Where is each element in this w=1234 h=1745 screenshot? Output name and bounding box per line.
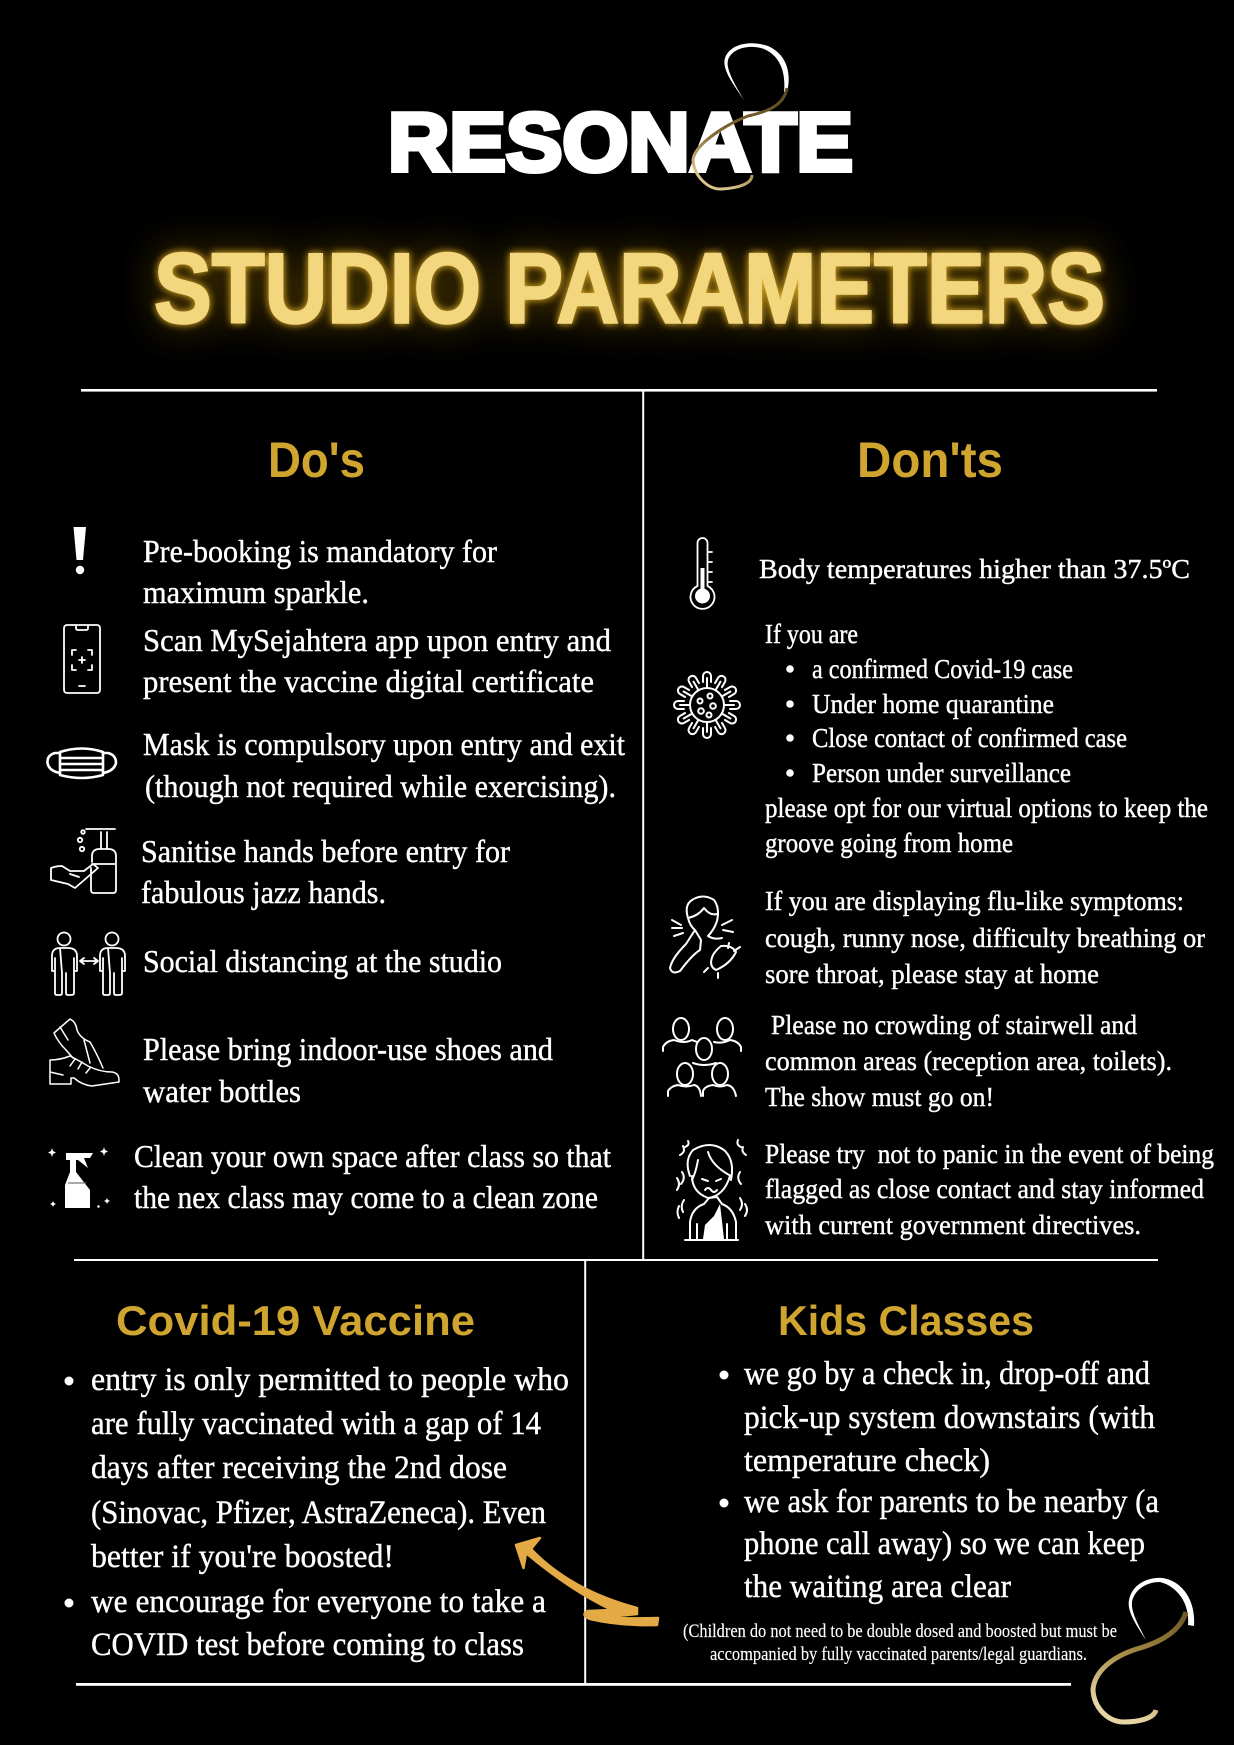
- icon: phone scan: [64, 625, 100, 693]
- logo: Resonate wordmark with swirl: [388, 43, 853, 189]
- bullet list: vaccination: are fully vaccinated with a gap of 14: [91, 1406, 541, 1442]
- bullet list: vaccination: better if you're boosted!: [91, 1539, 394, 1575]
- bullet list: vaccination: we encourage for everyone to take a: [91, 1584, 546, 1620]
- heading: Do's: Do's: [268, 432, 365, 488]
- text: mask: Mask is compulsory upon entry and exit: [143, 726, 625, 762]
- heading: Covid-19 Vaccine: Covid-19 Vaccine: [116, 1297, 475, 1344]
- bullet list: kids: pick-up system downstairs (with: [744, 1400, 1155, 1436]
- text: sanitise: [141, 833, 510, 910]
- bullet list: kids: temperature check): [744, 1443, 990, 1479]
- text: do not panic: [765, 1139, 1214, 1240]
- bullet list: vaccination: (Sinovac, Pfizer, AstraZeneca). Even: [91, 1495, 546, 1531]
- text: confirmed case list: Under home quarantine: [812, 689, 1054, 719]
- bullet list: vaccination: entry is only permitted to people who: [91, 1362, 569, 1398]
- bullet list: kids: [720, 1356, 1159, 1605]
- note: children: (Children do not need to be double dosed and boosted but must be: [683, 1622, 1117, 1642]
- icon: crowd of people: [663, 1018, 741, 1096]
- panel: Don'ts: [663, 432, 1214, 1240]
- note: children: accompanied by fully vaccinated parents/legal guardians.: [710, 1645, 1087, 1665]
- text: flu-like symptoms: [765, 886, 1205, 989]
- icon: virus: [674, 672, 740, 738]
- icon: hand sanitiser: [51, 829, 116, 893]
- text: pre-booking: Pre-booking is mandatory for: [143, 533, 497, 569]
- text: no crowding: common areas (reception area, toilets).: [765, 1046, 1172, 1076]
- icon: spray bottle: [48, 1147, 110, 1208]
- text: no crowding: [765, 1010, 1172, 1112]
- bullet list: vaccination: [64, 1362, 569, 1663]
- text: social distancing: Social distancing at the studio: [143, 943, 502, 979]
- icon: social distancing: [52, 932, 125, 995]
- panel: Covid-19 Vaccine: [64, 1297, 569, 1663]
- bullet list: kids: we ask for parents to be nearby (a: [744, 1484, 1159, 1520]
- text: do not panic: flagged as close contact and stay informed: [765, 1174, 1204, 1204]
- bullet list: vaccination: COVID test before coming to class: [91, 1627, 524, 1663]
- text: confirmed case list: Person under surveillance: [812, 758, 1071, 788]
- bullet list: kids: we go by a check in, drop-off and: [744, 1356, 1150, 1392]
- text: flu-like symptoms: sore throat, please stay at home: [765, 959, 1099, 989]
- panel: Kids Classes: [683, 1297, 1159, 1665]
- text: no crowding: Please no crowding of stairwell and: [771, 1010, 1137, 1040]
- icon: face mask: [47, 748, 116, 778]
- text: shoes: [143, 1031, 553, 1109]
- text: body temperature: Body temperatures higher than 37.5ºC: [759, 554, 1190, 584]
- text: flu-like symptoms: If you are displaying flu-like symptoms:: [765, 886, 1184, 916]
- text: MySejahtera: Scan MySejahtera app upon entry and: [143, 622, 611, 658]
- text: do not panic: with current government directives.: [765, 1210, 1141, 1240]
- text: clean space: the nex class may come to a clean zone: [134, 1179, 598, 1215]
- text: clean space: Clean your own space after class so that: [134, 1138, 611, 1174]
- icon: exclamation mark: [74, 527, 86, 574]
- icon: corner swirl: [1093, 1578, 1194, 1722]
- note: children: [683, 1622, 1117, 1665]
- icon: sick person: [670, 896, 740, 978]
- text: do not panic: Please try not to panic in the event of being: [765, 1139, 1214, 1169]
- text: sanitise: fabulous jazz hands.: [141, 874, 386, 910]
- text: MySejahtera: present the vaccine digital certificate: [143, 663, 594, 699]
- text: clean space: [134, 1138, 611, 1215]
- text: confirmed case list: Close contact of confirmed case: [812, 723, 1127, 753]
- text: confirmed case list: If you are: [765, 619, 858, 649]
- bullet list: kids: phone call away) so we can keep: [744, 1526, 1145, 1562]
- icon: shoes: [50, 1019, 119, 1086]
- title: Studio Parameters: STUDIO PARAMETERS: [154, 232, 1105, 344]
- heading: Don'ts: Don'ts: [857, 432, 1003, 488]
- text: MySejahtera: [143, 622, 611, 699]
- text: mask: (though not required while exercising).: [145, 768, 616, 804]
- text: mask: [143, 726, 625, 804]
- text: confirmed case list: groove going from home: [765, 828, 1013, 858]
- text: sanitise: Sanitise hands before entry for: [141, 833, 510, 869]
- text: confirmed case list: please opt for our virtual options to keep the: [765, 793, 1208, 823]
- bullet list: kids: the waiting area clear: [744, 1569, 1011, 1605]
- bullet list: vaccination: days after receiving the 2nd dose: [91, 1450, 507, 1486]
- text: no crowding: The show must go on!: [765, 1082, 994, 1112]
- text: confirmed case list: a confirmed Covid-19 case: [812, 654, 1073, 684]
- table rules: [74, 389, 1158, 1686]
- icon: thermometer: [690, 538, 714, 609]
- icon: panicking person: [677, 1140, 747, 1240]
- text: flu-like symptoms: cough, runny nose, difficulty breathing or: [765, 923, 1205, 953]
- text: shoes: Please bring indoor-use shoes and: [143, 1031, 553, 1067]
- panel: Do's: [47, 432, 625, 1215]
- text: confirmed case list: [765, 619, 1208, 858]
- arrow: gold: [516, 1538, 658, 1625]
- logo: Resonate wordmark with swirl: RESONATE: [388, 96, 853, 188]
- text: pre-booking: maximum sparkle.: [143, 574, 369, 610]
- heading: Kids Classes: Kids Classes: [778, 1297, 1034, 1344]
- text: shoes: water bottles: [143, 1073, 301, 1109]
- text: pre-booking: [143, 533, 497, 610]
